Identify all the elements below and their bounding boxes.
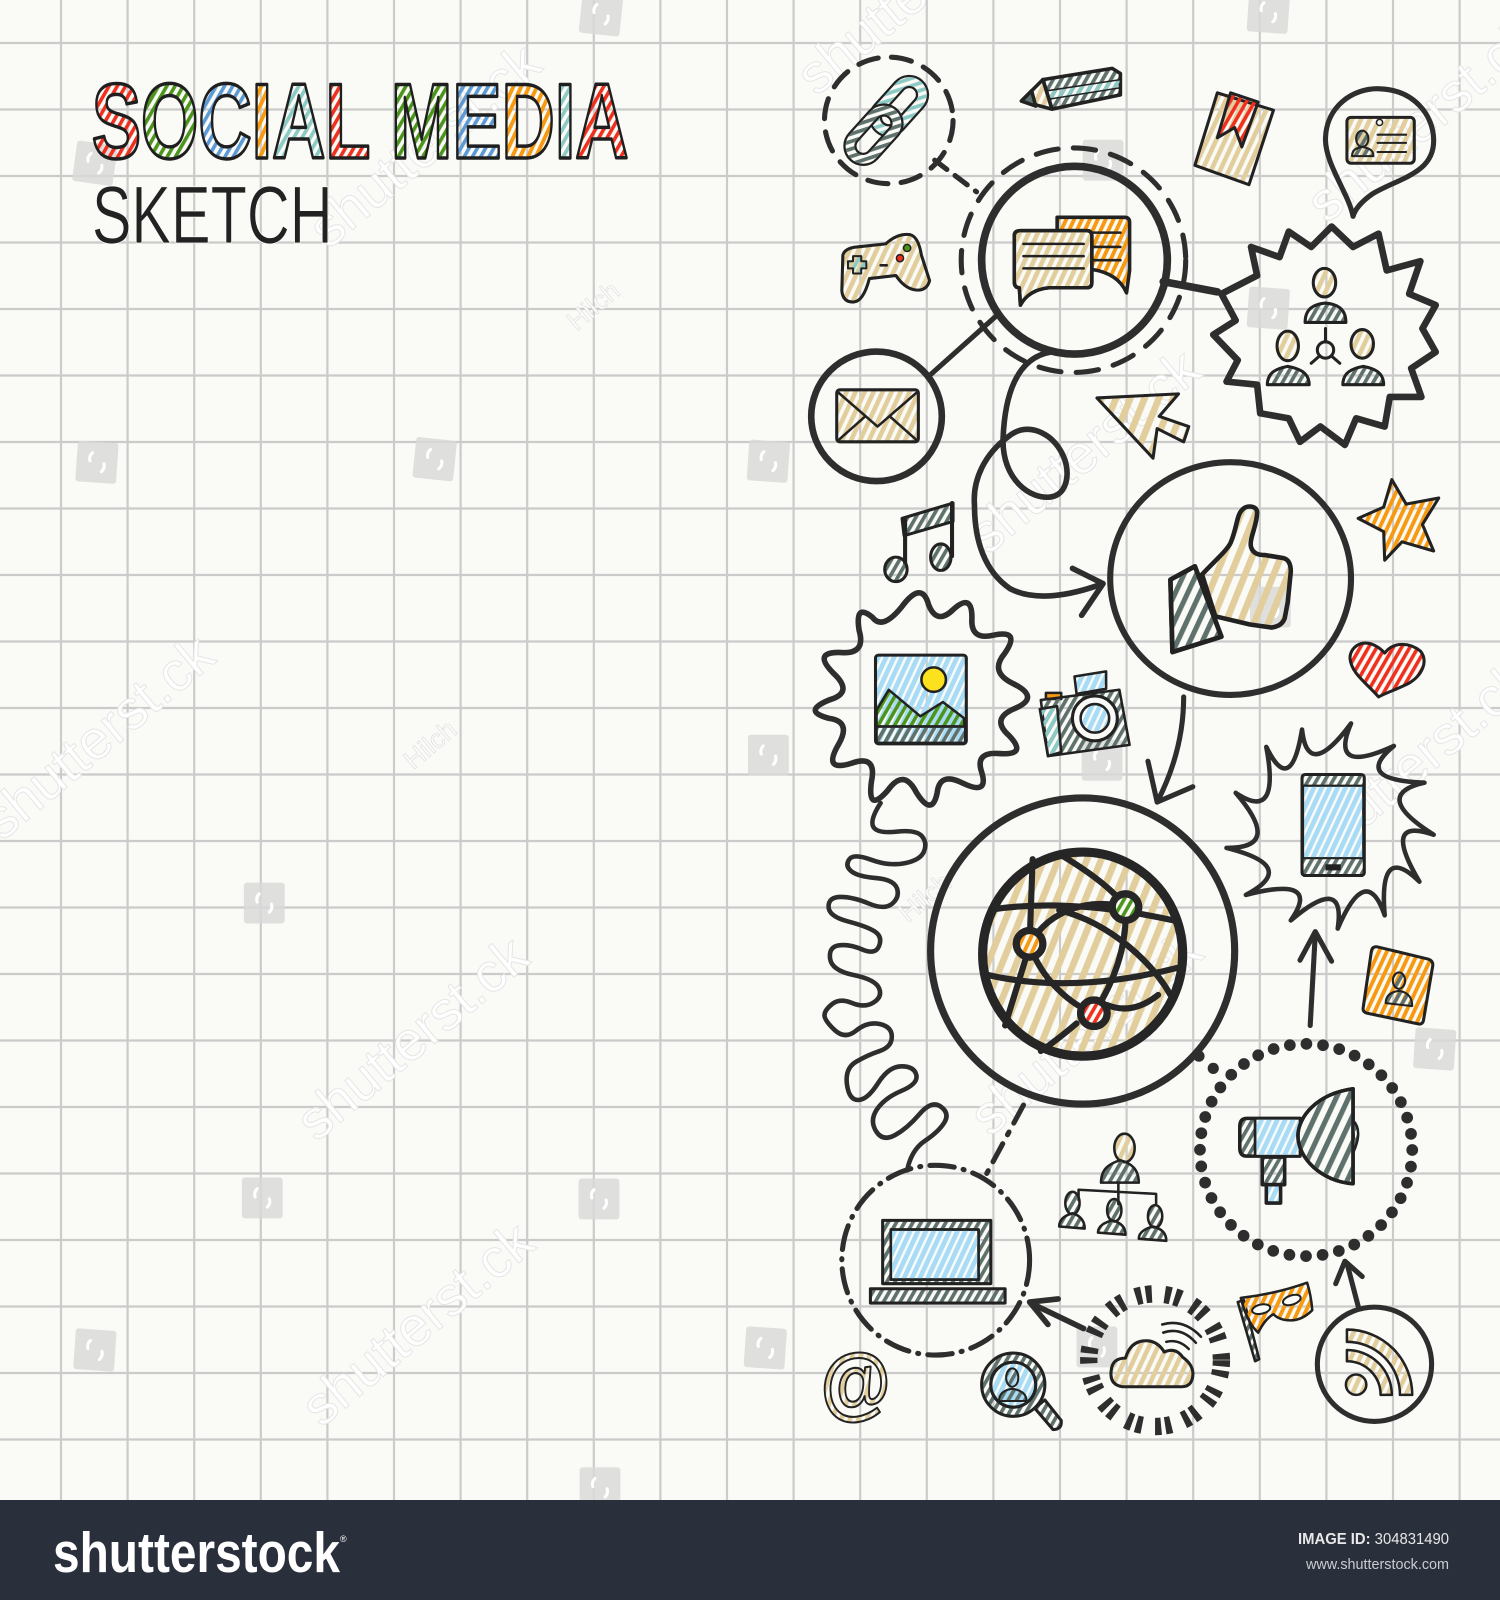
speech bubble with ID card	[1325, 89, 1434, 216]
icon: people network	[1267, 268, 1384, 385]
network nodes	[1016, 894, 1139, 1027]
watermark text: shutterst.ck	[956, 336, 1212, 565]
icon: megaphone	[1240, 1089, 1358, 1203]
icon: speech bubbles	[1014, 217, 1130, 305]
connector: chat to people burst	[1163, 282, 1217, 292]
like circle	[1110, 462, 1351, 695]
icon: thumbs up	[1170, 507, 1291, 652]
icon: chain link	[844, 76, 928, 165]
watermark author marks: Hilch	[561, 275, 626, 336]
watermark author marks: Hilch	[398, 714, 462, 775]
icon: wireless waves	[1162, 1323, 1201, 1349]
icon: at sign: @	[813, 1333, 897, 1431]
arrow: cloud to laptop	[1030, 1299, 1084, 1329]
cloud burst	[1089, 1294, 1221, 1427]
icon: landscape picture	[876, 655, 966, 744]
icon: laptop	[870, 1220, 1005, 1303]
link dashed circle	[824, 57, 953, 184]
icon: ID card	[1347, 117, 1414, 163]
icon: music notes	[885, 503, 953, 582]
icon: smartphone	[1302, 774, 1364, 876]
globe circle	[931, 798, 1235, 1104]
footer logo: shutterstock	[53, 1521, 340, 1585]
chat circle	[982, 166, 1167, 354]
icon: star	[1358, 480, 1439, 560]
connector: email to chat	[930, 315, 997, 376]
footer bar	[0, 1500, 1500, 1600]
arrow: like to globe	[1148, 697, 1193, 802]
people network burst	[1213, 227, 1436, 445]
spiky badge with phone	[1227, 723, 1434, 929]
icon: bookmarked note	[1195, 93, 1273, 185]
squiggle connector: picture to laptop	[824, 803, 947, 1170]
icon: pencil	[1021, 68, 1120, 109]
dashed connector: globe to laptop	[987, 1105, 1023, 1173]
dotted circle with megaphone	[1193, 1044, 1412, 1256]
icon: organisation chart	[1059, 1134, 1166, 1241]
subtitle: SKETCH: SKETCH	[92, 170, 333, 261]
icon: cursor arrow	[1097, 394, 1189, 458]
watermark text: shutterst.ck	[289, 1209, 545, 1438]
RSS circle	[1317, 1307, 1432, 1421]
icon: carnival mask	[1238, 1283, 1312, 1361]
icon: envelope	[837, 390, 918, 442]
icon: address book	[1363, 947, 1433, 1024]
title: SOCIAL MEDIA: SOCIAL MEDIA	[92, 61, 629, 181]
watermark author marks	[398, 275, 957, 928]
email circle	[811, 352, 942, 481]
laptop dash-dot circle	[842, 1165, 1030, 1355]
footer image id: IMAGE ID: 304831490	[1298, 1531, 1449, 1548]
icon: RSS	[1346, 1330, 1412, 1395]
arrow: RSS to megaphone	[1336, 1261, 1362, 1306]
arrow: megaphone to phone	[1300, 932, 1332, 1026]
icon: game controller	[842, 234, 930, 302]
watermark author marks: Hilch	[893, 867, 957, 928]
icon: camera	[1040, 671, 1130, 756]
wavy badge with picture	[815, 593, 1028, 805]
watermark text: shutterst.ck	[284, 923, 540, 1152]
footer registered mark: ®	[340, 1534, 347, 1544]
curly arrow: chat to like	[974, 352, 1103, 615]
footer url: www.shutterstock.com	[1305, 1556, 1449, 1573]
icon: magnifier with person	[982, 1353, 1061, 1430]
icon: cloud	[1111, 1341, 1193, 1387]
icon: heart	[1350, 643, 1424, 697]
watermark text: shutterst.ck	[296, 30, 552, 259]
dashed ring around chat circle	[961, 148, 1186, 372]
dashed connector: link to chat	[935, 160, 977, 192]
icon: network globe	[983, 852, 1183, 1056]
watermark text: shutterst.ck	[958, 918, 1214, 1147]
